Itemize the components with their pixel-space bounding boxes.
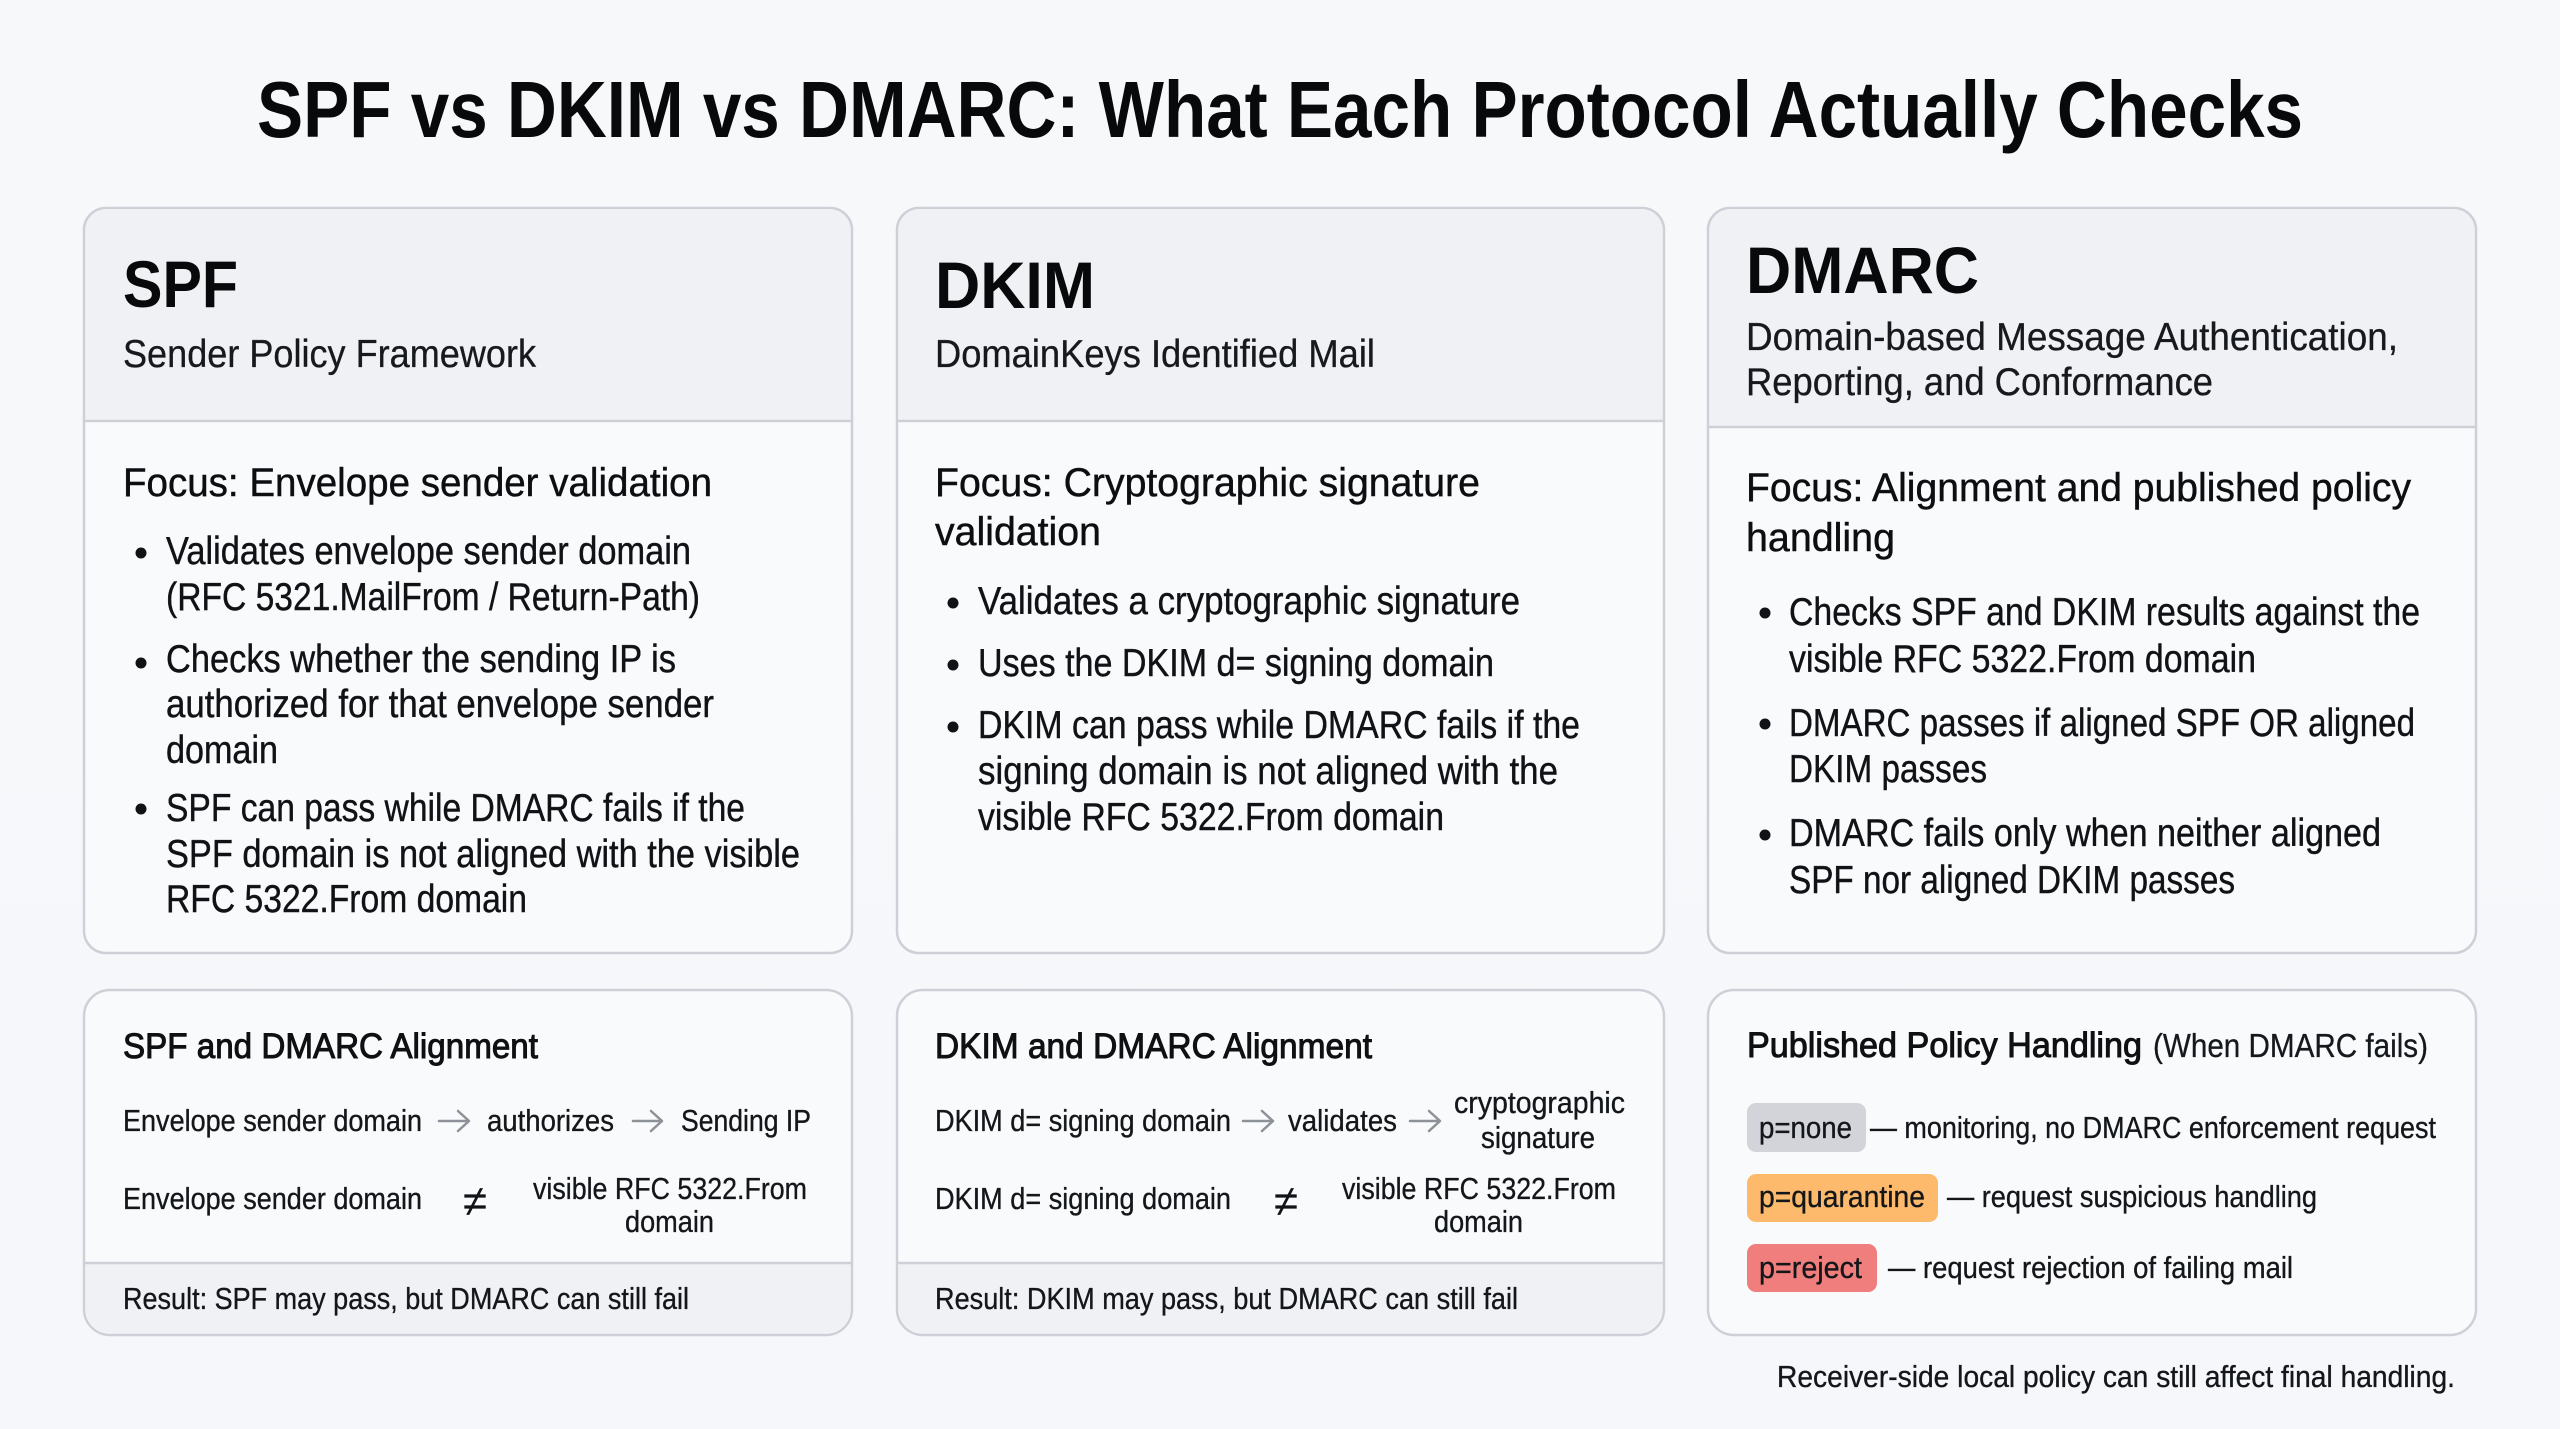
bullet: DMARC fails: SPF nor aligned DKIM passes <box>1789 859 2235 902</box>
focus: DKIM: Focus: Cryptographic signature <box>935 461 1480 505</box>
bullet: sending IP: authorized for that envelope sender <box>166 683 714 726</box>
comparison row: not equal: domain <box>625 1204 714 1239</box>
flow row: authorizes <box>123 1103 811 1138</box>
policy row: reject: p=reject <box>1759 1250 1862 1285</box>
subheading: DMARC expansion <box>1746 316 2398 404</box>
title: SPF vs DKIM vs DMARC: What Each Protocol Actually Checks <box>257 65 2303 154</box>
panel: published policy handling <box>1708 990 2476 1335</box>
bullet: DKIM can pass: signing domain is not aligned with the <box>978 750 1558 793</box>
policy row: quarantine <box>1747 1174 2317 1222</box>
policy row: quarantine: p=quarantine <box>1759 1179 1925 1214</box>
bullet list: SPF <box>136 530 800 921</box>
comparison row: not equal: DKIM d= signing domain <box>935 1181 1231 1216</box>
subheading: DKIM expansion: DomainKeys Identified Mail <box>935 333 1375 376</box>
panel: SPF <box>84 208 852 953</box>
bullet: signature: Validates a cryptographic signature <box>978 580 1520 623</box>
bullet list: DMARC <box>1760 591 2420 902</box>
policy row: quarantine: — request suspicious handling <box>1947 1179 2317 1214</box>
flow row: validates: DKIM d= signing domain <box>935 1103 1231 1138</box>
flow row: validates: signature <box>1481 1120 1595 1155</box>
comparison row: not equal: visible RFC 5322.From <box>1342 1171 1616 1206</box>
result: SPF: Result: SPF may pass, but DMARC can still fail <box>123 1281 689 1316</box>
bullet: d= domain: Uses the DKIM d= signing domain <box>978 642 1494 685</box>
bullet: SPF can pass: SPF can pass while DMARC fails if the <box>166 787 745 830</box>
comparison row: not equal <box>123 1171 807 1239</box>
bullet: DMARC fails: DMARC fails only when neither aligned <box>1789 812 2381 855</box>
bullet list: DKIM <box>948 580 1580 839</box>
bullet: DKIM can pass: visible RFC 5322.From domain <box>978 796 1444 839</box>
bullet: sending IP <box>136 638 714 772</box>
arrow <box>1410 1111 1440 1131</box>
subheading: DMARC expansion: Domain-based Message Authentication, <box>1746 316 2398 359</box>
flow row: validates: cryptographic <box>1454 1085 1625 1120</box>
heading: DKIM alignment: DKIM and DMARC Alignment <box>935 1026 1372 1066</box>
bullet: DKIM can pass <box>948 704 1580 839</box>
subheading: SPF expansion: Sender Policy Framework <box>123 333 536 376</box>
heading: policy handling <box>1747 1025 2428 1065</box>
policy row: reject <box>1747 1244 2293 1292</box>
focus: DMARC <box>1746 466 2411 560</box>
flow row: authorizes: Sending IP <box>681 1103 811 1138</box>
bullet: sending IP: domain <box>166 729 278 772</box>
bullet: checks results: visible RFC 5322.From domain <box>1789 638 2256 681</box>
bullet: SPF can pass <box>136 787 800 921</box>
bullet: sending IP: Checks whether the sending IP is <box>166 638 676 681</box>
footnote: Receiver-side local policy can still affect final handling. <box>1777 1359 2455 1394</box>
heading: DMARC: DMARC <box>1746 233 1979 307</box>
focus: DKIM <box>935 461 1480 554</box>
bullet: DMARC passes: DKIM passes <box>1789 748 1987 791</box>
bullet: envelope domain <box>136 530 700 619</box>
panel: DKIM and DMARC alignment <box>897 990 1664 1335</box>
arrow <box>633 1111 662 1131</box>
focus: DKIM: validation <box>935 510 1101 554</box>
flow row: validates: validates <box>1288 1103 1397 1138</box>
policy row: none: — monitoring, no DMARC enforcement request <box>1870 1110 2436 1145</box>
bullet: SPF can pass: SPF domain is not aligned with the visible <box>166 833 800 876</box>
flow row: authorizes: authorizes <box>487 1103 614 1138</box>
arrow <box>439 1111 469 1131</box>
policy row: none: p=none <box>1759 1110 1852 1145</box>
heading: DKIM: DKIM <box>935 248 1095 322</box>
bullet: SPF can pass: RFC 5322.From domain <box>166 878 527 921</box>
comparison row: not equal: visible RFC 5322.From <box>533 1171 807 1206</box>
heading: SPF: SPF <box>123 247 238 321</box>
policy row: reject: — request rejection of failing mail <box>1888 1250 2293 1285</box>
bullet: DKIM can pass: DKIM can pass while DMARC fails if the <box>978 704 1580 747</box>
bullet: checks results <box>1760 591 2420 681</box>
bullet: DMARC fails <box>1760 812 2381 902</box>
panel: DKIM <box>897 208 1664 953</box>
focus: DMARC: handling <box>1746 516 1895 560</box>
focus: SPF: Focus: Envelope sender validation <box>123 461 712 505</box>
policy row: none <box>1747 1103 2436 1152</box>
comparison row: not equal <box>935 1171 1616 1239</box>
bullet: envelope domain: Validates envelope sender domain <box>166 530 691 573</box>
flow row: validates <box>935 1085 1625 1155</box>
comparison row: not equal: domain <box>1434 1204 1523 1239</box>
bullet: checks results: Checks SPF and DKIM results against the <box>1789 591 2420 634</box>
bullet: DMARC passes <box>1760 702 2415 791</box>
bullet: DMARC passes: DMARC passes if aligned SPF OR aligned <box>1789 702 2415 745</box>
subheading: DMARC expansion: Reporting, and Conformance <box>1746 361 2213 404</box>
not-equal sign: ≠ <box>463 1177 487 1226</box>
result: DKIM: Result: DKIM may pass, but DMARC can still fail <box>935 1281 1518 1316</box>
heading: policy handling: Published Policy Handling <box>1747 1025 2142 1065</box>
panel: SPF and DMARC alignment <box>84 990 852 1335</box>
heading: SPF alignment: SPF and DMARC Alignment <box>123 1026 538 1066</box>
panel: DMARC <box>1708 208 2476 953</box>
not-equal sign: ≠ <box>1274 1177 1298 1226</box>
heading: policy handling: (When DMARC fails) <box>2153 1027 2428 1064</box>
focus: DMARC: Focus: Alignment and published policy <box>1746 466 2411 510</box>
bullet: envelope domain: (RFC 5321.MailFrom / Return-Path) <box>166 576 700 619</box>
comparison row: not equal: Envelope sender domain <box>123 1181 422 1216</box>
arrow <box>1243 1111 1273 1131</box>
flow row: authorizes: Envelope sender domain <box>123 1103 422 1138</box>
